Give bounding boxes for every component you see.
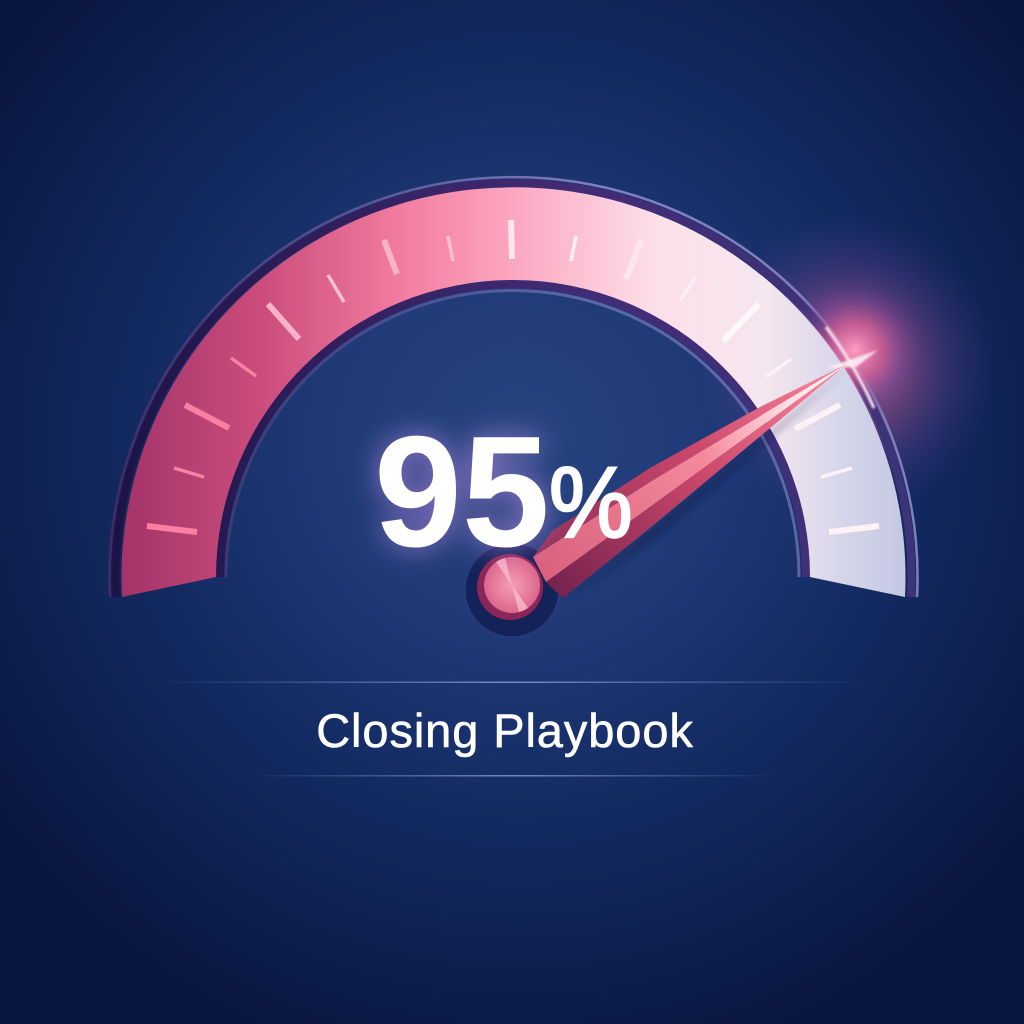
- gauge inner dark stripe: [220, 284, 806, 577]
- flare at needle tip: [825, 327, 878, 408]
- hub cap: [484, 557, 540, 613]
- value digits: 95: [374, 404, 550, 580]
- near flare glow on rim: [783, 278, 927, 422]
- title: Closing Playbook: [316, 704, 694, 757]
- needle hub: [477, 554, 543, 620]
- hub outer: [477, 554, 543, 620]
- percent sign: %: [549, 446, 633, 559]
- needle upper facet: [533, 364, 847, 557]
- hub dark ring: [465, 543, 559, 637]
- gauge arc band: [121, 187, 905, 597]
- percentage value: [374, 404, 633, 580]
- needle middle facet: [533, 364, 847, 582]
- gauge outer rim line: [109, 177, 917, 597]
- divider top: [150, 682, 874, 683]
- divider bottom: [240, 775, 784, 776]
- rim highlight: [826, 327, 874, 408]
- star glint: [825, 350, 878, 368]
- needle lower facet: [546, 364, 847, 598]
- wide glow behind gauge tip: [700, 215, 1000, 515]
- gauge inner rim line: [226, 290, 799, 577]
- gauge outer dark stripe: [115, 183, 911, 597]
- tick marks: [147, 220, 879, 532]
- gauge: [109, 177, 927, 597]
- value glow: 95: [374, 404, 550, 580]
- needle shadow: [563, 370, 847, 602]
- needle: [533, 364, 847, 602]
